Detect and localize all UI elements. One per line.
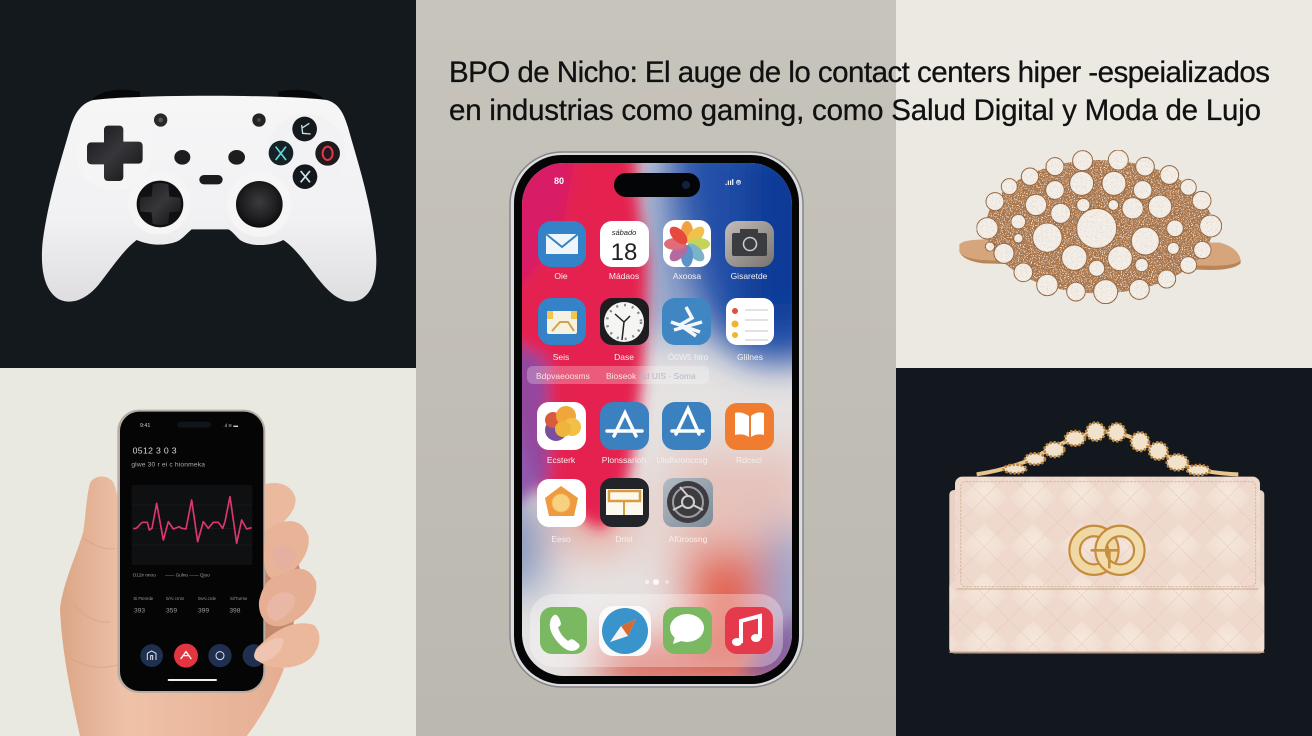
app: books: Rdceci: [736, 455, 762, 465]
icon: hand holding health phone: [60, 410, 319, 736]
stats: 393: [134, 607, 145, 614]
status bar: 9:41: [140, 423, 150, 429]
dock: [530, 594, 783, 667]
app: maps-like: Seis: [553, 352, 569, 362]
icon: quilted luxury handbag: [949, 423, 1264, 653]
app: calendar: 18: [611, 239, 637, 266]
app: home: Eeso: [551, 534, 571, 544]
title: [449, 56, 1270, 127]
app: settings: Afüroosng: [669, 534, 708, 544]
search pill: Bdpvaeoosms: [536, 371, 590, 381]
GG clasp: [1075, 531, 1139, 570]
app row 4: [537, 478, 713, 544]
app: photos: [663, 220, 711, 281]
app: calendar: Mádaos: [609, 271, 639, 281]
panel: jewellery background: [896, 0, 1312, 368]
search pill: gd UIS · Soma: [640, 371, 696, 381]
fingernails: [254, 545, 297, 662]
legend row: —— Gulno —— Qjoo: [165, 573, 210, 578]
panel: center background: [416, 0, 896, 736]
title: en industrias como gaming, como Salud Digital y Moda de Lujo: [449, 94, 1261, 127]
stats: [133, 596, 248, 614]
dock: phone: [540, 607, 587, 654]
app: blue squiggle: Ó0W5 hiro: [668, 352, 709, 362]
app: flower: Ecsterk: [547, 455, 576, 465]
stats: 359: [166, 607, 177, 614]
health phone body: [117, 410, 265, 693]
app row 3: [537, 402, 774, 465]
app: app store: [600, 402, 649, 465]
app: mail: Oie: [554, 271, 568, 281]
dock: safari: [599, 606, 651, 656]
app: home: [537, 479, 586, 544]
dock: music: [725, 607, 773, 654]
health app heading: [131, 445, 205, 468]
app: flower: [537, 402, 586, 465]
app: dark tool: Drist: [615, 534, 633, 544]
app: blue squiggle: [662, 298, 711, 362]
app: mail: [538, 221, 586, 281]
app: settings: [663, 478, 713, 544]
app: app store 2: Ulolhoonccsg: [656, 455, 708, 465]
search pill: [527, 366, 709, 384]
central smartphone: [509, 151, 804, 688]
stats: Si Ftenrde: [133, 596, 154, 601]
stats: 0/Ai crnsr: [166, 596, 185, 601]
app: camera: Gisaretde: [731, 271, 768, 281]
title: BPO de Nicho: El auge de lo contact centers hiper -espeializados: [449, 56, 1270, 89]
legend row: [133, 573, 210, 578]
heart rate chart: [132, 485, 252, 565]
stats: 0sAi.crde: [198, 596, 217, 601]
health app heading: 0512 3 0 3: [133, 445, 177, 455]
search pill: Bioseok: [606, 371, 637, 381]
action buttons: [140, 644, 265, 668]
app: clock: [600, 298, 649, 362]
bag body: [949, 477, 1264, 653]
icon: diamond cuff bracelet: [959, 150, 1241, 304]
stats: 398: [229, 607, 241, 614]
stats: 399: [198, 607, 209, 614]
app: photos: Axoosa: [673, 271, 701, 281]
stats: Si/Turme: [230, 596, 248, 601]
status bar and dynamic island: [554, 173, 741, 197]
app: maps-like: [538, 298, 586, 362]
app: notes: Glilnes: [737, 352, 763, 362]
panel: luxury bag background: [896, 368, 1312, 736]
status bar: .ıl ≋ ▬: [223, 423, 238, 428]
chain handle: [977, 423, 1238, 475]
app: dark tool: [600, 478, 649, 544]
legend row: O12ir nnoo: [133, 573, 156, 578]
app: notes: [726, 298, 774, 362]
app row 2: [538, 298, 774, 362]
status bar: [140, 423, 238, 429]
app: clock: Dase: [614, 352, 634, 362]
app: app store: Plonssarioh: [602, 455, 646, 465]
status bar and dynamic island: 80: [554, 176, 564, 186]
app: calendar: [600, 221, 649, 281]
fingers: [255, 483, 319, 668]
app: books: [725, 403, 774, 465]
panel: gaming background: [0, 0, 416, 368]
health app heading: glwe 30 r ei c hionmeka: [131, 461, 205, 468]
app: calendar: sábado: [612, 228, 636, 237]
dock: messages: [663, 607, 712, 654]
app row 1: [538, 220, 774, 281]
wallpaper gradient: [522, 163, 792, 676]
status bar and dynamic island: .ııl ⌾: [725, 178, 741, 187]
page dots: [645, 579, 669, 585]
icon: game controller: [42, 90, 376, 302]
app: app store 2: [656, 402, 711, 465]
app: camera: [725, 221, 774, 281]
finger shadow backing: [264, 505, 302, 668]
hand behind phone: [60, 477, 284, 736]
panel: digital health background: [0, 368, 416, 736]
